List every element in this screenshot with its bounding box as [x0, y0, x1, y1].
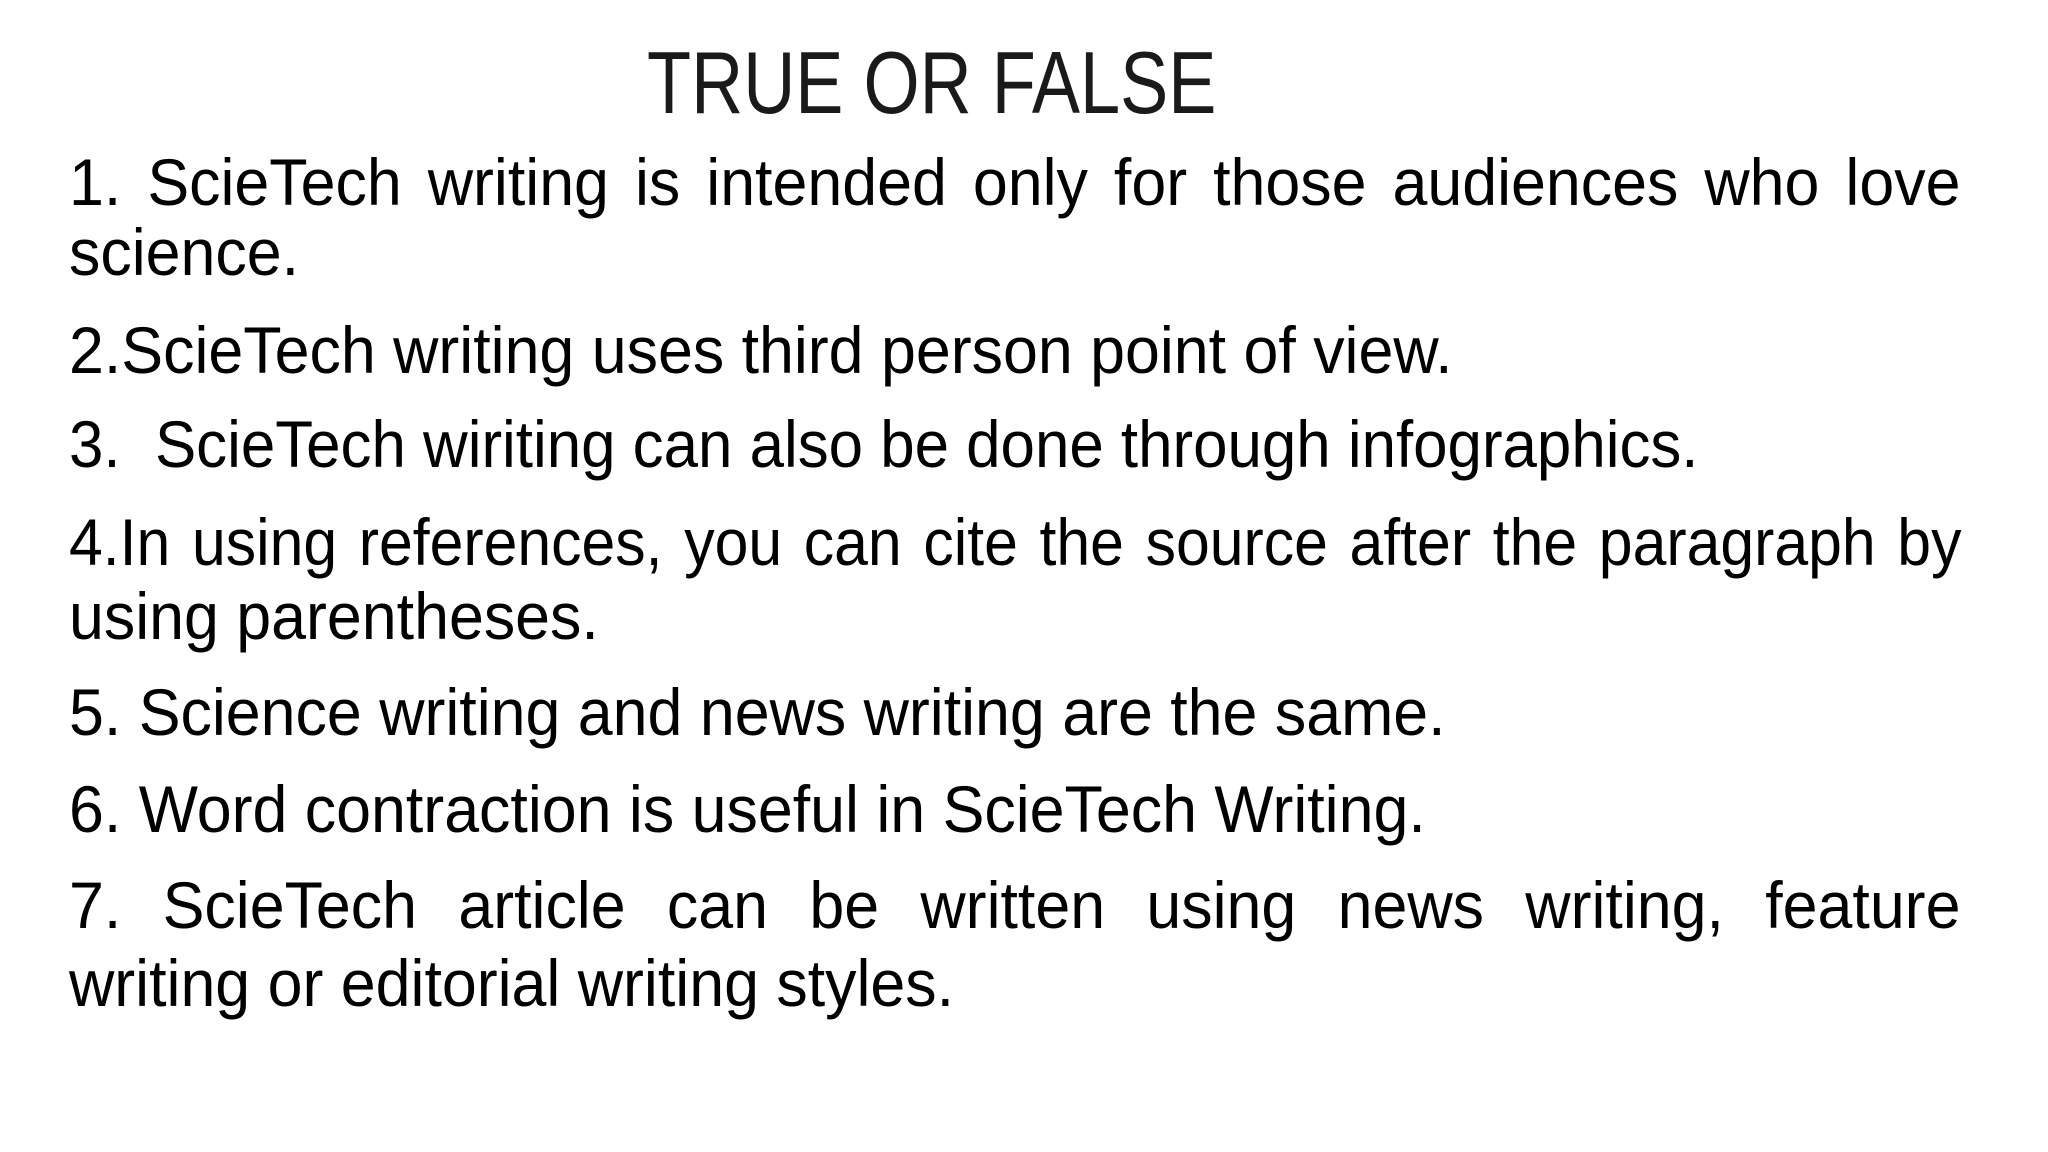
statement 1: 1. ScieTech writing is intended only for those audiences who love — [69, 145, 1960, 219]
statement 3: 3. ScieTech wiriting can also be done through infographics. — [69, 407, 1698, 481]
statement 6: 6. Word contraction is useful in ScieTech Writing. — [69, 772, 1426, 846]
statement 1 — [69, 145, 1960, 289]
statement 7: writing or editorial writing styles. — [69, 946, 954, 1020]
statement 4 — [69, 505, 1962, 653]
title: TRUE OR FALSE — [647, 33, 1216, 132]
statement 4: 4.In using references, you can cite the source after the paragraph by — [69, 505, 1961, 579]
statement 7 — [68, 868, 1960, 1020]
statement 2: 2.ScieTech writing uses third person point of view. — [69, 313, 1453, 387]
statement 1: science. — [69, 215, 299, 289]
statement 4: using parentheses. — [69, 579, 599, 653]
statement 5: 5. Science writing and news writing are the same. — [69, 675, 1446, 749]
statement 7: 7. ScieTech article can be written using news writing, feature — [69, 868, 1960, 942]
